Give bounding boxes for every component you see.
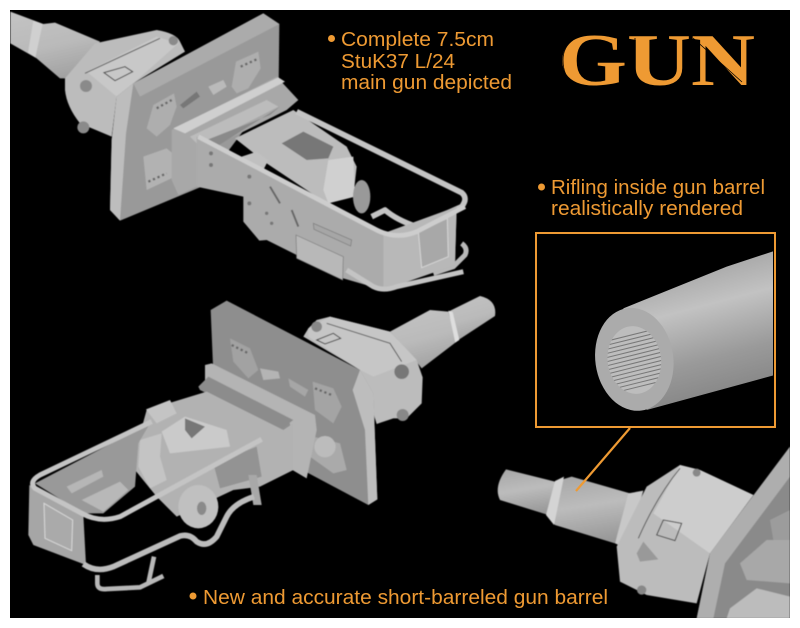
bore with rifling xyxy=(608,326,662,394)
rear interior xyxy=(35,423,150,513)
breech block xyxy=(172,77,298,195)
barrel xyxy=(498,469,555,515)
housing xyxy=(617,465,753,603)
inset: rifling close-up xyxy=(536,233,775,427)
callout: rifling: Rifling inside gun barrel xyxy=(551,177,765,199)
barrel xyxy=(448,296,495,340)
plate xyxy=(696,476,790,618)
plate brackets xyxy=(147,93,177,137)
guard tube front xyxy=(198,137,465,235)
lower gun model xyxy=(28,296,495,589)
plate brackets xyxy=(230,338,258,378)
top gun model xyxy=(10,12,466,290)
title: GUN: GUN xyxy=(558,20,755,102)
gear hub xyxy=(178,485,218,528)
muzzle face xyxy=(595,308,674,411)
callout: complete main gun: StuK37 L/24 xyxy=(341,51,455,73)
inset frame xyxy=(536,233,775,427)
housing xyxy=(65,30,185,137)
bottom right gun close-up xyxy=(498,447,790,618)
callout: rifling xyxy=(538,177,765,220)
callout: complete main gun xyxy=(328,29,512,94)
armour plate xyxy=(110,13,279,221)
leader line xyxy=(576,428,630,491)
callout: complete main gun: Complete 7.5cm xyxy=(341,29,494,51)
housing xyxy=(303,317,423,424)
callout: rifling: realistically rendered xyxy=(551,198,743,220)
callout: short barrel: New and accurate short-barreled gun barrel xyxy=(203,587,608,609)
inset barrel xyxy=(589,251,775,416)
barrel xyxy=(10,12,100,78)
guard tube back xyxy=(297,112,465,227)
rear plate xyxy=(28,485,86,565)
guard tubes xyxy=(33,422,262,519)
side shield xyxy=(197,137,457,290)
armour plate xyxy=(211,301,377,505)
breech block xyxy=(205,363,317,478)
callout: complete main gun: main gun depicted xyxy=(341,72,512,94)
